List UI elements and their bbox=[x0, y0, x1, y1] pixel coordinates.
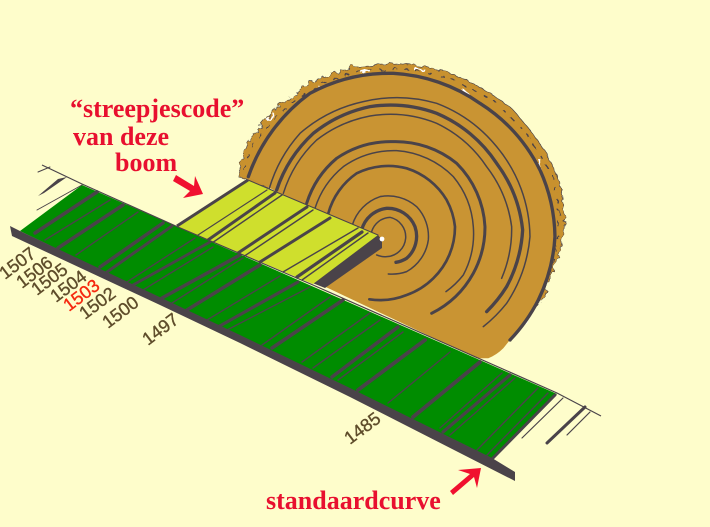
heartwood and growth rings bbox=[248, 73, 555, 358]
bark bbox=[240, 63, 565, 340]
tree pith bbox=[380, 237, 384, 241]
year 1506: 1506 bbox=[12, 252, 56, 292]
sample side face bbox=[310, 235, 382, 288]
sample top face bbox=[178, 180, 378, 284]
streepjescode: sample of this tree bbox=[177, 180, 384, 288]
tree trunk cross-section bbox=[240, 63, 565, 358]
year 1503 highlighted: 1503 bbox=[59, 275, 103, 315]
band top edge bbox=[42, 165, 601, 416]
band stripes bbox=[35, 192, 555, 458]
band front edge bbox=[10, 226, 515, 481]
year 1502: 1502 bbox=[75, 283, 119, 323]
heading: standaardcurve: standaardcurve bbox=[266, 486, 441, 515]
year 1500: 1500 bbox=[98, 292, 142, 332]
heading: streepjescode van deze boom: “streepjescode” bbox=[70, 94, 244, 123]
heading: streepjescode van deze boom: van deze bbox=[73, 122, 169, 151]
arrow: to standaardcurve bbox=[450, 468, 481, 495]
arrow: to streepjescode bbox=[173, 175, 203, 198]
year 1497: 1497 bbox=[138, 309, 182, 349]
band stripes past left end bbox=[37, 167, 82, 210]
standaardcurve: reference band bbox=[10, 165, 601, 481]
sample stripes bbox=[198, 180, 378, 280]
band stripes past right end bbox=[522, 398, 590, 443]
band green surface bbox=[20, 185, 557, 459]
heading: streepjescode van deze boom: boom bbox=[115, 148, 177, 177]
year 1504: 1504 bbox=[46, 266, 90, 306]
sample edge bbox=[177, 180, 248, 226]
year 1505: 1505 bbox=[27, 259, 71, 299]
year 1485: 1485 bbox=[340, 408, 384, 448]
year labels bbox=[0, 243, 384, 448]
